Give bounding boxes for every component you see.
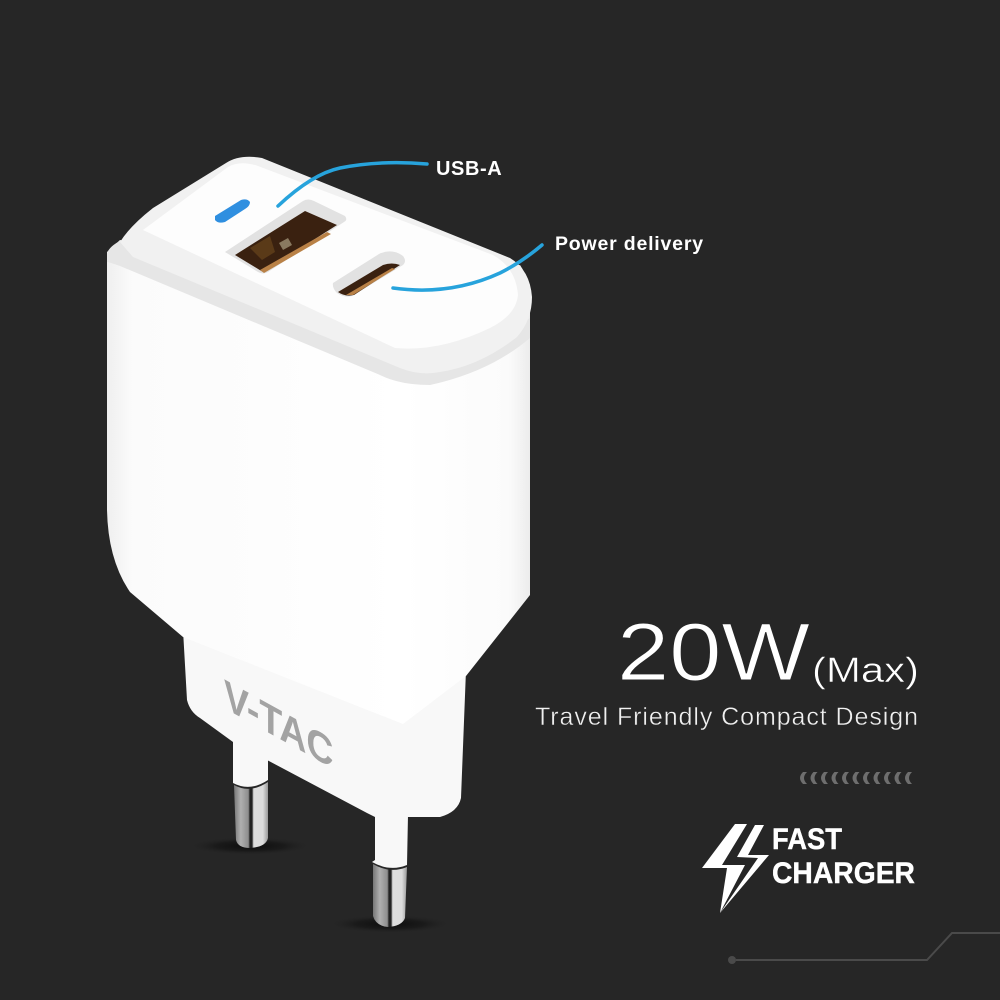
pin shadows (188, 837, 452, 933)
lip under cap (107, 241, 530, 385)
left pin (233, 740, 268, 848)
heading: 20W (Max): (Max) (812, 651, 919, 690)
USB-C port (333, 251, 405, 297)
heading: 20W (Max): 20W (617, 607, 811, 698)
decorative chevron row (800, 772, 912, 784)
main body (107, 240, 530, 724)
icon: white charger product (107, 157, 532, 933)
subheading: Travel Friendly Compact Design (535, 703, 918, 731)
logo: V-TAC: V-TAC (224, 670, 333, 778)
callout label: USB-A: USB-A (436, 158, 502, 180)
callout line: Power delivery (393, 245, 542, 290)
callout line: USB-A (278, 163, 427, 206)
label: FAST CHARGER: CHARGER (772, 857, 915, 890)
right pin (372, 810, 408, 927)
cap top face (143, 163, 518, 349)
label: FAST CHARGER: FAST (772, 823, 842, 856)
callout label: Power delivery: Power delivery (555, 233, 704, 255)
decorative circuit line (728, 933, 1000, 964)
indicator LED (215, 199, 250, 223)
heading: 20W (Max) (617, 607, 919, 698)
plug base (183, 620, 466, 817)
label: FAST CHARGER (772, 823, 915, 890)
cap outer (120, 157, 532, 373)
icon: lightning bolt (702, 824, 769, 913)
USB-A port (225, 200, 346, 274)
